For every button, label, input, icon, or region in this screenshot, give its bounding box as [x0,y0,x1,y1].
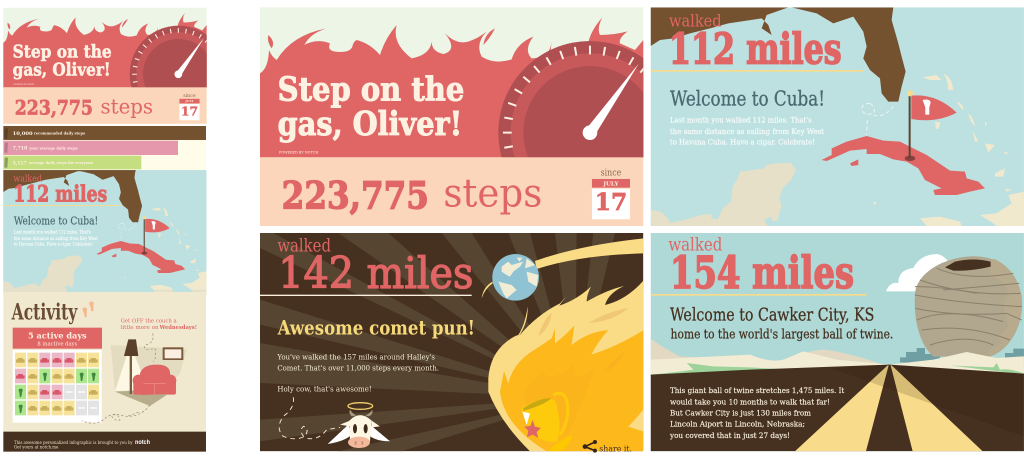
grass [651,363,1024,376]
dashed trail [82,333,156,423]
living room illustration [111,339,187,406]
distance heading: 142 miles: 142 miles [278,249,473,299]
sky [651,233,1024,451]
small calendar: JULY [184,99,194,103]
divider line [260,295,472,296]
small map [3,170,206,295]
heading: step on the gas: gas, Oliver! [278,104,462,143]
small flames, gauge and steps band [3,8,227,124]
map of Florida and Cuba with flag [651,7,1024,226]
bar: everyone average [3,156,141,169]
comet tail [535,238,644,269]
small calendar: 17 [181,103,198,118]
divider line [651,70,863,72]
body text: Last month you walked 112 miles. That's [670,116,812,125]
small body text: Last month you walked 112 miles. That's [14,230,91,235]
panel: daily step bars [3,126,206,170]
distance heading: 112 miles: walked [669,12,722,31]
panel: comet [260,233,644,454]
small body text: to Havana Cuba. Have a cigar. Celebrate! [14,242,93,247]
small heading [13,42,112,81]
angel cow [328,403,390,448]
callout: get off the couch [121,319,197,331]
small body text [14,230,98,247]
calendar: since July 17: JULY [602,181,620,187]
body text: would take you 10 months to walk that far! [670,397,830,406]
subheading: Cawker City [670,305,893,343]
road ground [651,365,1024,451]
subheading: Welcome to Cuba: Welcome to Cuba! [670,86,825,110]
dashed trail [279,397,340,439]
body text: to Havana Cuba. Have a cigar. Celebrate! [670,137,815,146]
callout: get off the couch: little more on [121,325,159,331]
callout: get off the couch: Wednesdays! [159,325,197,331]
road lines [795,365,983,451]
share it: share it. [599,444,632,454]
panel: Cuba (large) [651,7,1024,226]
earth globe [482,254,539,301]
bar: everyone average: 5,117 [13,160,27,166]
calendar grid [13,350,102,423]
bar: recommended: recommended daily steps [34,132,85,136]
bar: recommended [3,126,206,140]
distance heading: 154 miles: 154 miles [670,248,854,299]
heading: Activity: Activity [11,299,78,325]
steps count [282,172,542,217]
ball of twine [915,256,1022,357]
foreground hills [651,351,1024,375]
small steps count [15,95,153,119]
small steps count: steps [101,95,153,119]
small distance heading: walked [13,175,42,185]
small subheading: Welcome to Cuba! [14,214,98,227]
body text [670,116,825,146]
body text: the same distance as sailing from Key West [670,127,825,136]
callout: get off the couch: Get OFF the couch a [121,319,177,325]
active days banner: 5 active days [28,331,87,341]
body text: you covered that in just 27 days! [669,431,790,440]
cloud [886,254,948,292]
small heading: Step on the [13,42,112,62]
footer [3,432,206,452]
city skyline [900,348,1024,365]
flames, gauge and steps band [260,7,682,226]
footer: notch [135,440,150,446]
panel: twine [651,233,1024,451]
small credit: POWERED BY NOTCH [13,84,34,86]
steps count: 223,775 [282,173,429,217]
active days banner [13,328,102,349]
body text [669,386,845,440]
share it [583,440,632,454]
back hills [651,339,883,371]
icon: footprints [82,301,95,318]
body text: This giant ball of twine stretches 1,475 miles. It [670,386,845,395]
bar: your average: 7,718 [13,146,27,152]
small calendar: since [183,93,196,99]
panel: left column step on the gas [3,8,227,124]
body text: But Cawker City is just 130 miles from [670,408,812,417]
active days banner: 8 inactive days [37,342,77,348]
subheading: awesome comet pun: Awesome comet pun! [277,316,475,340]
heading: step on the gas [278,70,464,143]
body text: You've walked the 157 miles around Halley's [276,353,435,362]
panel: left column Cuba [3,170,206,295]
bar: recommended: 10,000 [13,131,34,137]
small distance heading: 112 miles [13,181,107,207]
calendar: since July 17: 17 [595,188,627,216]
distance heading: 154 miles: walked [668,234,722,255]
body text [276,353,439,393]
subheading: Cawker City: home to the world's largest ball of twine. [671,328,893,343]
distance heading: 142 miles: walked [277,235,331,256]
panel: activity [3,292,206,452]
powered by credit: POWERED BY NOTCH [279,149,319,154]
road shadow [870,364,1024,404]
body text: Lincoln Aiport in Lincoln, Nebraska; [670,420,805,429]
small body text: the same distance as sailing from Key West [14,236,98,241]
small heading: gas, Oliver! [13,61,111,81]
body text: Holy cow, that's awesome! [277,384,372,393]
distance heading: 112 miles: 112 miles [669,24,842,73]
body text: Comet. That's over 11,000 steps every month. [277,363,439,372]
small calendar [181,93,198,118]
bar: everyone average: average daily steps for everyone [29,161,93,165]
steps count: steps [443,172,542,217]
footer: This awesome personalized infographic is brought to you by [14,440,133,445]
calendar: since July 17 [595,169,627,216]
divider line [651,294,867,296]
footer: Get yours at notch.me [14,445,59,450]
small divider [3,204,119,207]
panel: step on the gas (large) [260,7,682,226]
heading: step on the gas: Step on the [278,70,464,109]
distance heading: 154 miles [668,234,854,299]
activity background [3,292,206,432]
subheading: Cawker City: Welcome to Cawker City, KS [670,305,874,325]
small steps count: 223,775 [15,95,93,119]
calendar: since July 17: since [601,169,621,179]
bar: your average [3,141,178,155]
comet fireball [488,280,644,451]
small distance heading [13,175,107,207]
sunburst background [260,233,643,451]
trophy [522,393,573,451]
bar: your average: your average daily steps [28,146,78,150]
distance heading: 112 miles [669,12,842,73]
